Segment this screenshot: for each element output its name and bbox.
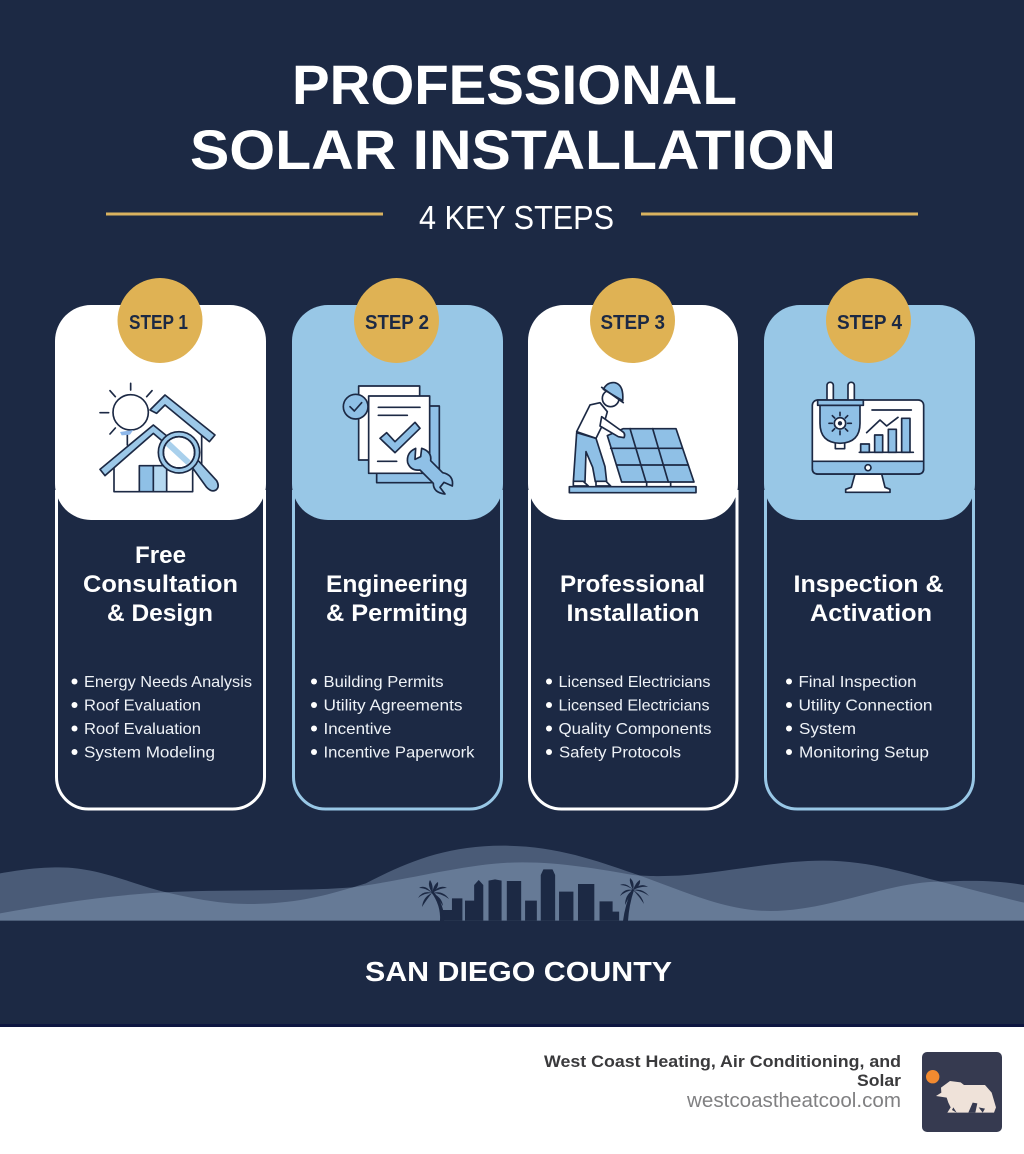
- icon: bear logo: [922, 1052, 1002, 1132]
- step 4 list: Final Inspection: [798, 674, 916, 691]
- icon: plug and monitor with chart: [812, 382, 924, 492]
- company name: West Coast Heating, Air Conditioning, and: [544, 1052, 901, 1071]
- subtitle: 4 key steps: 4 KEY STEPS: [419, 199, 614, 236]
- step 1 heading: Consultation: [83, 571, 238, 598]
- step 2 heading: Engineering: [326, 571, 468, 598]
- icon: house with sun and magnifier: [100, 383, 218, 492]
- step 1 heading: & Design: [107, 600, 213, 627]
- step 2 list: Incentive Paperwork: [324, 744, 476, 762]
- step 2 list: [311, 674, 476, 762]
- step 3 list: Quality Components: [558, 721, 712, 738]
- step 3 list: Safety Protocols: [559, 744, 681, 762]
- step 3 heading: Professional: [560, 571, 705, 598]
- panel: step 2: [292, 278, 503, 809]
- step 4 list: [786, 674, 932, 762]
- step 1 list: System Modeling: [84, 744, 215, 762]
- step 4 heading: [794, 571, 944, 627]
- step 2 list: Building Permits: [324, 674, 444, 691]
- website: westcoastheatcool.com: [686, 1090, 901, 1112]
- icon: documents with check and wrench: [343, 386, 453, 494]
- step 2 heading: [326, 571, 468, 627]
- company name: Solar: [857, 1071, 901, 1090]
- title: [190, 53, 836, 181]
- icon: city skyline: [441, 869, 619, 921]
- step 3 heading: [560, 571, 705, 627]
- step 1 list: Roof Evaluation: [84, 721, 201, 738]
- icon: left palm tree: [418, 880, 449, 921]
- step 2 list: Utility Agreements: [324, 698, 462, 714]
- step 1 list: Energy Needs Analysis: [84, 674, 252, 691]
- panel: step 2: STEP 2: [365, 312, 429, 334]
- step 1 list: Roof Evaluation: [84, 698, 201, 714]
- step 4 list: Monitoring Setup: [799, 744, 929, 762]
- step 4 heading: Inspection &: [794, 571, 944, 598]
- title: PROFESSIONAL: [292, 53, 737, 116]
- title: SOLAR INSTALLATION: [190, 118, 836, 181]
- panel: step 3: STEP 3: [600, 312, 665, 334]
- panel: step 1: [55, 278, 266, 809]
- subtitle: 4 key steps: [106, 199, 918, 236]
- icon: worker installing solar panel: [569, 383, 696, 493]
- step 1 list: [72, 674, 252, 762]
- step 3 list: Licensed Electricians: [558, 698, 710, 714]
- panel: step 4: [764, 278, 975, 809]
- step 3 list: [546, 674, 712, 762]
- panel: step 3: [528, 278, 738, 809]
- step 2 list: Incentive: [324, 721, 392, 738]
- step 2 heading: & Permiting: [326, 600, 468, 627]
- step 1 heading: Free: [135, 542, 186, 569]
- hills and San Diego skyline: [0, 846, 1024, 921]
- step 3 list: Licensed Electricians: [558, 674, 710, 691]
- step 4 heading: Activation: [810, 600, 932, 627]
- panel: step 4: STEP 4: [837, 312, 903, 334]
- step 4 list: Utility Connection: [798, 698, 932, 714]
- icon: right palm tree: [620, 878, 649, 921]
- footer: [0, 1024, 1024, 1154]
- company name: [544, 1052, 901, 1090]
- panel: step 1: STEP 1: [129, 312, 188, 334]
- step 1 heading: [83, 542, 238, 627]
- region label: SAN DIEGO COUNTY: [365, 956, 672, 987]
- step 3 heading: Installation: [566, 600, 700, 627]
- step 4 list: System: [799, 721, 856, 738]
